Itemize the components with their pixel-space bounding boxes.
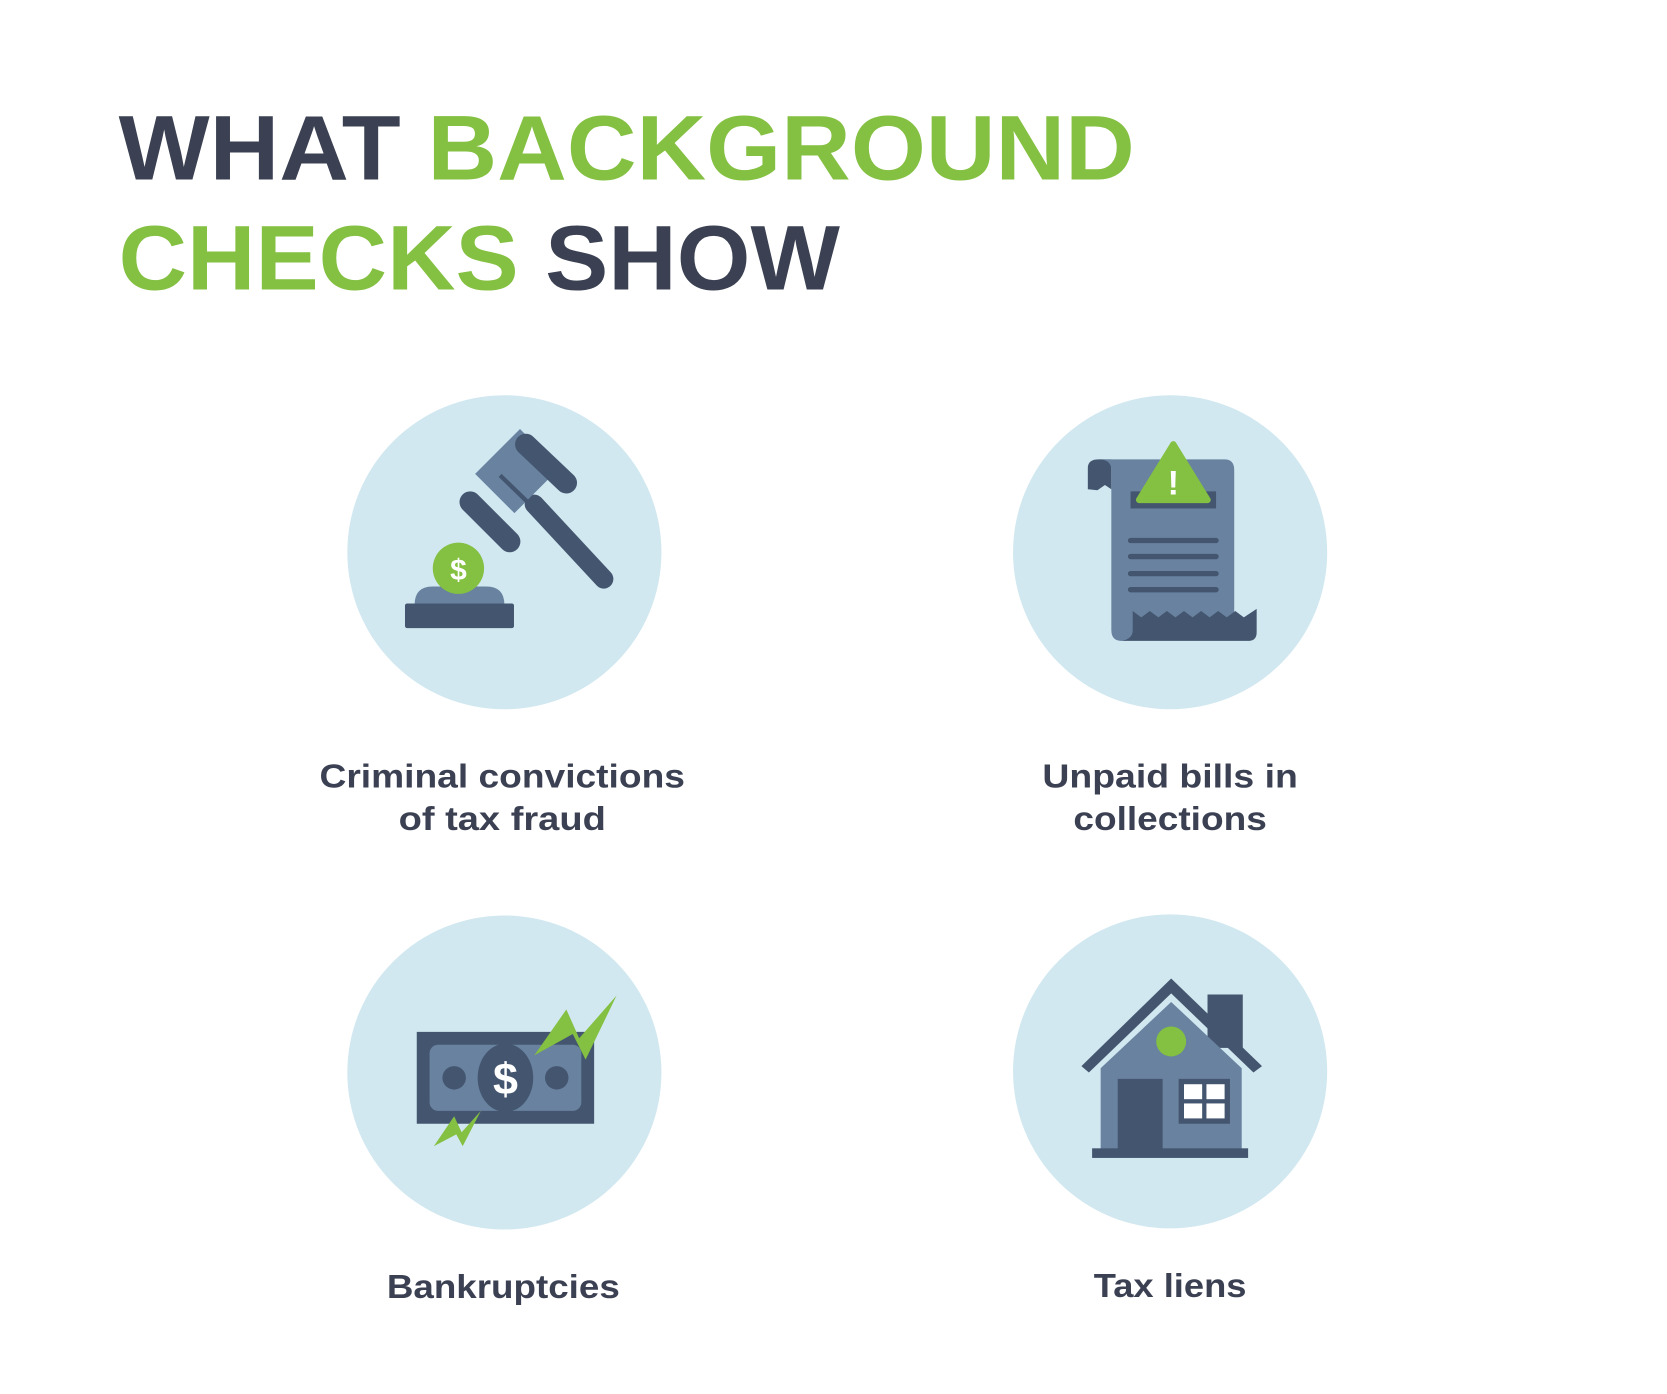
title (119, 97, 1135, 309)
label: Tax liens (1094, 1268, 1247, 1305)
icon: dollar bill: $ (493, 1053, 518, 1104)
icon: gavel (347, 395, 661, 709)
panel: criminal convictions (320, 395, 685, 838)
label: Bankruptcies (387, 1269, 620, 1306)
label: Unpaid bills in (1042, 758, 1298, 795)
panel: bankruptcies (347, 915, 661, 1306)
panel: unpaid bills: collections (1073, 801, 1267, 838)
panel: criminal convictions: of tax fraud (399, 801, 606, 838)
title: WHAT BACKGROUND (119, 97, 1135, 199)
title: CHECKS SHOW (119, 207, 840, 309)
icon: gavel: $ (450, 554, 467, 587)
label: Criminal convictions (320, 758, 685, 795)
icon: bill: ! (1168, 465, 1179, 503)
icon: bill (1013, 395, 1327, 709)
panel: unpaid bills (1013, 395, 1327, 838)
icon: house (1013, 914, 1327, 1228)
panel: tax liens (1013, 914, 1327, 1305)
icon: dollar bill (347, 915, 661, 1229)
